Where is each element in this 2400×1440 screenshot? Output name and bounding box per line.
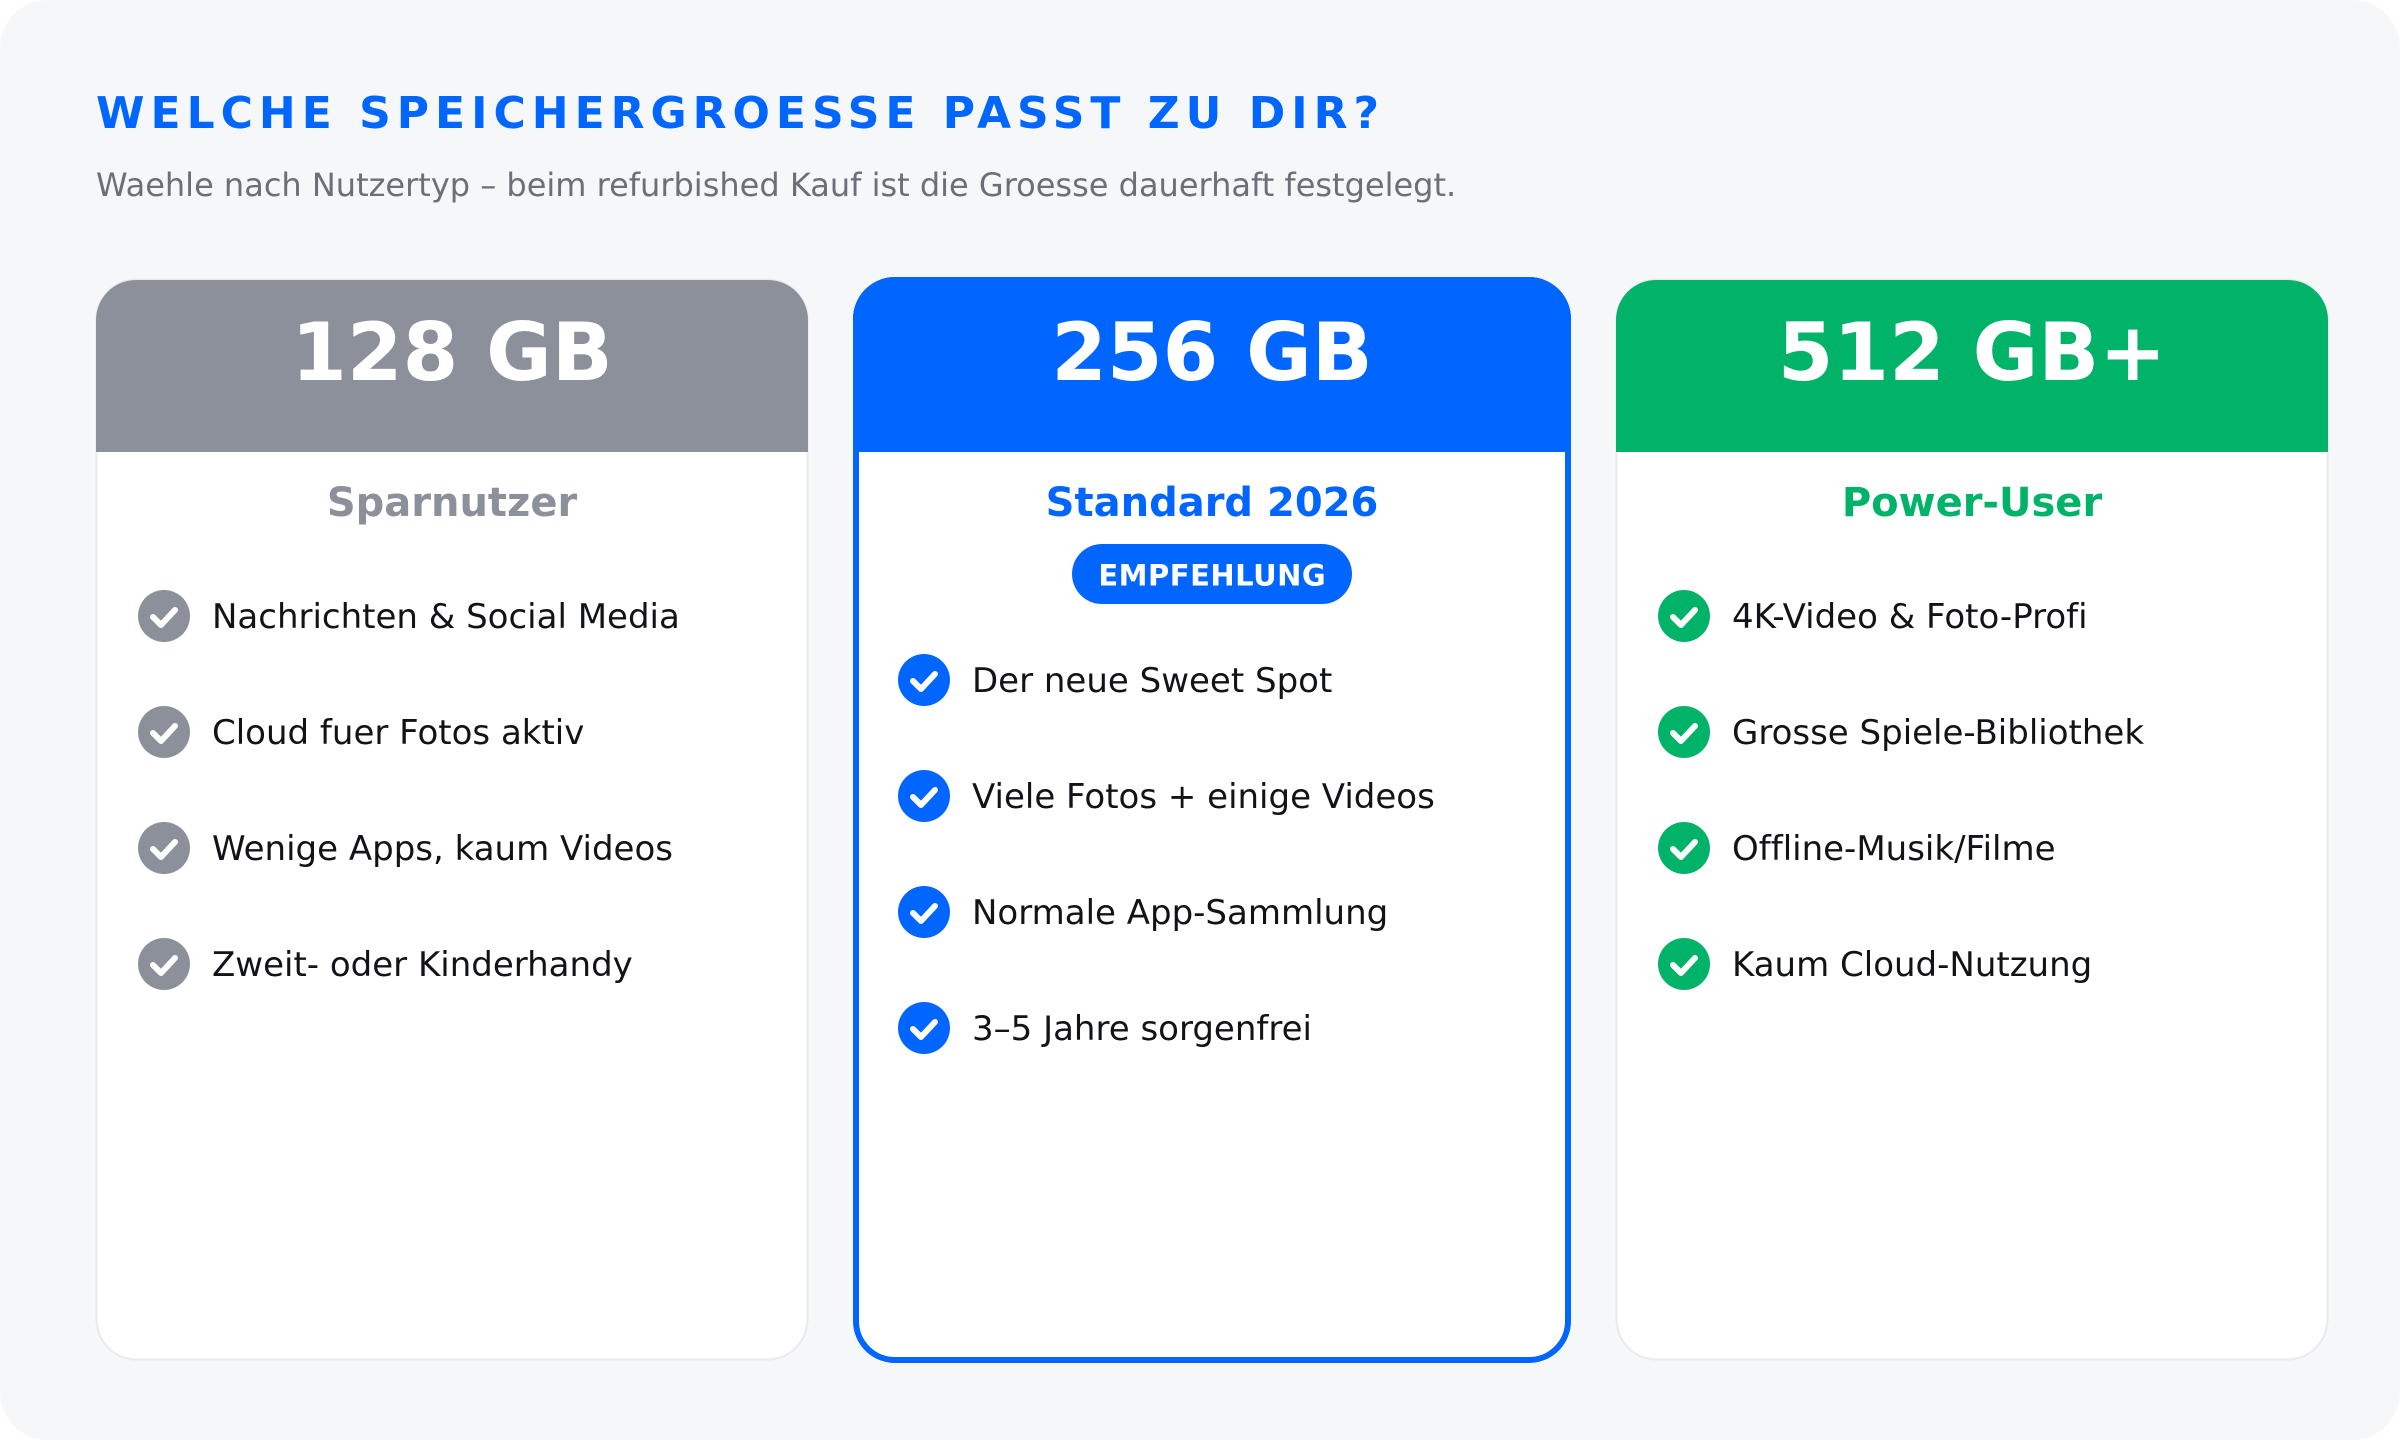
storage size: 512 GB+: [1778, 306, 2166, 399]
card body: [856, 280, 1568, 1360]
storage size: 256 GB: [1051, 306, 1373, 399]
card header: [1616, 280, 2328, 452]
list item: Sweet Spot: [898, 654, 1332, 706]
list item: Jahre: 3–5 Jahre sorgenfrei: [972, 1009, 1312, 1049]
list item: Wenige Apps: [138, 822, 673, 874]
list item: Wenige Apps: Wenige Apps, kaum Videos: [212, 829, 673, 869]
panel: 256 GB: [853, 277, 1571, 1360]
list item: Cloud: [138, 706, 584, 758]
list item: Sweet Spot: Der neue Sweet Spot: [972, 661, 1332, 701]
title: WELCHE SPEICHERGROESSE PASST ZU DIR?: [96, 88, 1385, 139]
panel: 128 GB: [96, 280, 808, 1360]
card body: [1616, 280, 2328, 1360]
list item: App-Sammlung: [898, 886, 1388, 938]
list item: Cloud-Nutzung: Kaum Cloud-Nutzung: [1732, 945, 2092, 985]
list item: Nachrichten: [138, 590, 680, 642]
list item: 4K-Video: [1658, 590, 2088, 642]
list item: Spiele: Grosse Spiele-Bibliothek: [1732, 713, 2144, 753]
recommendation badge: EMPFEHLUNG: [1098, 559, 1326, 593]
list item: Spiele: [1658, 706, 2144, 758]
list item: 4K-Video: 4K-Video & Foto-Profi: [1732, 597, 2088, 637]
panel: 512 GB+: [1616, 280, 2328, 1360]
list item: Offline: Offline-Musik/Filme: [1732, 829, 2056, 869]
list item: Zweithandy: Zweit- oder Kinderhandy: [212, 945, 633, 985]
list item: Jahre: [898, 1002, 1312, 1054]
list item: Cloud: Cloud fuer Fotos aktiv: [212, 713, 584, 753]
user type: Power-User: [1842, 480, 2102, 526]
list item: Fotos: [898, 770, 1435, 822]
user type: Sparnutzer: [327, 480, 577, 526]
subtitle: Waehle nach Nutzertyp – beim refurbished Kauf ist die Groesse dauerhaft festgelegt.: [96, 166, 1456, 204]
list item: App-Sammlung: Normale App-Sammlung: [972, 893, 1388, 933]
list item: Fotos: Viele Fotos + einige Videos: [972, 777, 1435, 817]
card header: [853, 277, 1571, 452]
list item: Offline: [1658, 822, 2056, 874]
card header: [96, 280, 808, 452]
storage size: 128 GB: [291, 306, 613, 399]
card body: [96, 280, 808, 1360]
list item: Cloud-Nutzung: [1658, 938, 2092, 990]
list item: Zweithandy: [138, 938, 633, 990]
recommendation badge: [1072, 544, 1352, 604]
list item: Nachrichten: Nachrichten & Social Media: [212, 597, 680, 637]
user type: Standard 2026: [1046, 480, 1378, 526]
